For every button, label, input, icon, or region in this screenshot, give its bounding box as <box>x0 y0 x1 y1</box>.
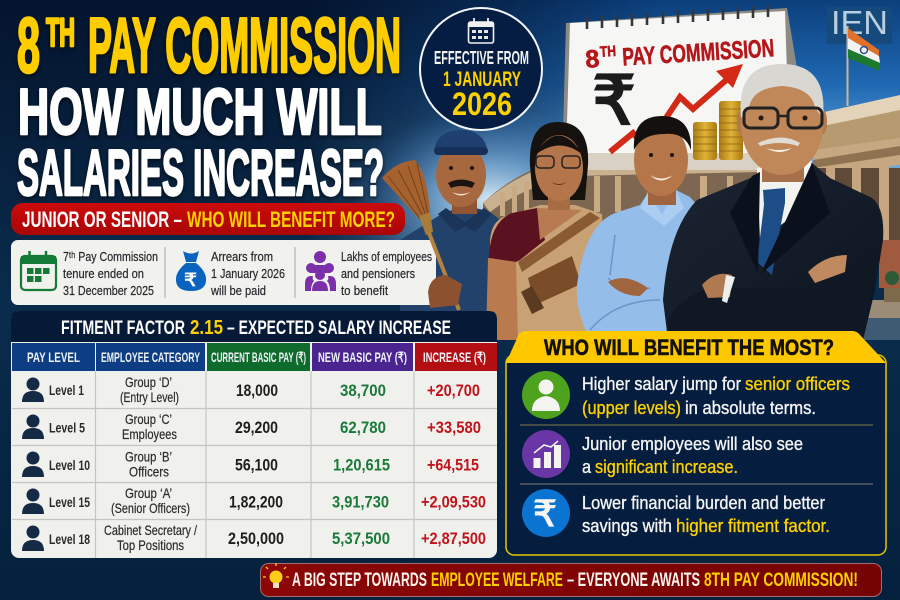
title line 1 <box>17 1 401 89</box>
row: level 5: Employees <box>122 426 177 442</box>
calendar heading: PAY COMMISSION <box>621 34 775 72</box>
title line 2: HOW MUCH WILL <box>18 75 382 148</box>
table header row: CURRENT BASIC PAY (₹) <box>211 349 306 365</box>
row: level 5: Group ‘C’ <box>125 411 172 427</box>
benefit: senior officers: (upper levels) <box>582 398 681 418</box>
calendar heading: 8 <box>585 45 600 74</box>
row: level 18: Cabinet Secretary / <box>104 522 197 538</box>
row: level 1: 18,000 <box>236 381 278 400</box>
row: level 1 <box>22 374 480 405</box>
table header row: NEW BASIC PAY (₹) <box>318 349 407 365</box>
row: level 1: Level 1 <box>49 382 84 398</box>
icon: calendar <box>468 18 494 43</box>
row: level 18: 5,37,500 <box>332 529 390 548</box>
parliament building <box>483 95 900 302</box>
row: level 18: 2,50,000 <box>228 529 284 548</box>
text: PAY COMMISSION <box>88 1 401 89</box>
icon: light bulb <box>263 563 289 588</box>
watermark: IEN logo: IEN <box>831 4 888 41</box>
broom <box>382 160 459 310</box>
footer banner <box>260 563 882 596</box>
info strip <box>11 240 436 305</box>
coin stacks <box>693 101 743 160</box>
row: level 1: 38,700 <box>340 381 386 400</box>
beneficiaries text: and pensioners <box>341 266 415 281</box>
arrears text: will be paid <box>210 283 266 298</box>
benefit: savings: savings with <box>582 516 672 536</box>
row: level 1: Group ‘D’ <box>125 374 172 390</box>
benefit: senior officers: Higher salary jump for <box>582 374 741 394</box>
tenure text: 31 December 2025 <box>63 283 154 298</box>
table header row: EMPLOYEE CATEGORY <box>101 349 200 365</box>
icon: person <box>522 371 570 419</box>
benefit: savings: higher fitment factor. <box>676 516 830 536</box>
table header row: INCREASE (₹) <box>423 349 486 365</box>
footer banner: – EVERYONE AWAITS <box>567 570 700 591</box>
title <box>17 1 401 209</box>
effective date badge: 1 JANUARY <box>443 68 521 91</box>
effective date badge <box>420 8 542 130</box>
icon: people group <box>305 251 336 291</box>
title line 3: SALARIES INCREASE? <box>17 136 384 209</box>
benefit: savings: Lower financial burden and better <box>582 493 825 513</box>
row: level 18: +2,87,500 <box>421 529 486 548</box>
row: level 15: 3,91,730 <box>332 492 389 512</box>
row: level 15: Level 15 <box>49 494 90 510</box>
icon: money bag <box>176 251 206 291</box>
row: level 5: 62,780 <box>340 418 386 437</box>
person: woman <box>486 122 610 340</box>
tenure text: tenure ended on <box>63 266 144 281</box>
panel heading <box>506 331 886 363</box>
effective date badge: 2026 <box>452 86 512 122</box>
benefit: senior officers: senior officers <box>745 374 850 394</box>
row: level 5: +33,580 <box>427 418 481 437</box>
row: level 10: +64,515 <box>427 456 479 474</box>
beneficiaries text: Lakhs of employees <box>341 249 432 264</box>
row: level 18: Level 18 <box>49 531 90 547</box>
fitment table <box>11 311 497 558</box>
icon: rupee <box>522 489 570 537</box>
title line 1: TH <box>46 11 75 55</box>
book <box>528 256 581 305</box>
arrears text <box>210 249 285 298</box>
row: level 5 <box>22 411 481 442</box>
benefit: junior employees: significant increase. <box>595 457 738 477</box>
table header row: PAY LEVEL <box>27 349 80 365</box>
row: level 15: +2,09,530 <box>421 492 486 512</box>
row: level 18 <box>22 522 486 553</box>
icon: money bag: ₹ <box>184 270 198 290</box>
beneficiaries text: to benefit <box>341 283 388 298</box>
icon: Indian flag <box>846 26 880 106</box>
crossed arms <box>668 275 875 340</box>
tenure text: 7ᵗʰ Pay Commission <box>63 249 158 264</box>
subtitle banner <box>11 203 405 235</box>
calendar with chart <box>562 5 797 170</box>
benefit: savings <box>522 489 830 537</box>
row: level 10 <box>22 448 479 480</box>
beneficiaries text <box>341 249 432 298</box>
icon: bar chart <box>522 430 570 478</box>
row: level 10: Group ‘B’ <box>125 448 172 464</box>
person: young man <box>577 116 700 340</box>
row: level 1: (Entry Level) <box>120 389 179 405</box>
arrears text: Arrears from <box>211 249 273 264</box>
table header row <box>12 343 497 371</box>
footer banner: EMPLOYEE WELFARE <box>431 570 563 591</box>
tenure text <box>63 249 158 298</box>
calendar heading: TH <box>599 43 616 61</box>
row: level 18: Top Positions <box>117 537 184 553</box>
row: level 5: 29,200 <box>235 418 278 437</box>
icon: rupee: ₹ <box>533 493 557 534</box>
benefit: junior employees: a <box>582 457 592 477</box>
calendar heading <box>585 33 775 74</box>
table title: FITMENT FACTOR <box>61 318 185 339</box>
subtitle banner: JUNIOR OR SENIOR – <box>22 207 182 232</box>
benefit: junior employees: Junior employees will also see <box>582 434 803 454</box>
panel: who will benefit <box>506 331 886 555</box>
table title: – EXPECTED SALARY INCREASE <box>227 318 451 339</box>
row: level 5: Level 5 <box>49 420 85 436</box>
row: level 15 <box>22 485 486 516</box>
icon: green calendar <box>21 251 56 290</box>
row: level 1: +20,700 <box>427 381 480 400</box>
effective date badge: EFFECTIVE FROM <box>434 48 529 68</box>
panel heading: WHO WILL BENEFIT THE MOST? <box>544 335 834 360</box>
person: senior officer <box>663 64 883 340</box>
row: level 10: Level 10 <box>49 457 90 473</box>
row: level 15: (Senior Officers) <box>111 500 190 516</box>
row: level 10: 56,100 <box>235 456 278 474</box>
table title: 2.15 <box>190 317 223 339</box>
rupee symbol: ₹ <box>592 63 636 139</box>
calendar rings <box>587 5 768 29</box>
row: level 10: Officers <box>129 464 169 480</box>
title line 1: 8 <box>17 1 40 89</box>
benefit: senior officers <box>522 371 850 419</box>
row: level 10: 1,20,615 <box>333 456 390 474</box>
row: level 15: 1,82,200 <box>229 492 283 512</box>
footer banner: A BIG STEP TOWARDS <box>292 570 427 591</box>
worker hand <box>428 275 462 308</box>
subtitle banner: WHO WILL BENEFIT MORE? <box>187 207 395 232</box>
benefit: junior employees <box>522 430 803 478</box>
red growth arrow <box>610 64 743 152</box>
table title <box>11 311 497 342</box>
arrears text: 1 January 2026 <box>211 266 285 281</box>
row: level 15: Group ‘A’ <box>125 485 172 501</box>
benefit: senior officers: in absolute terms. <box>685 398 816 418</box>
person: worker <box>400 130 503 320</box>
